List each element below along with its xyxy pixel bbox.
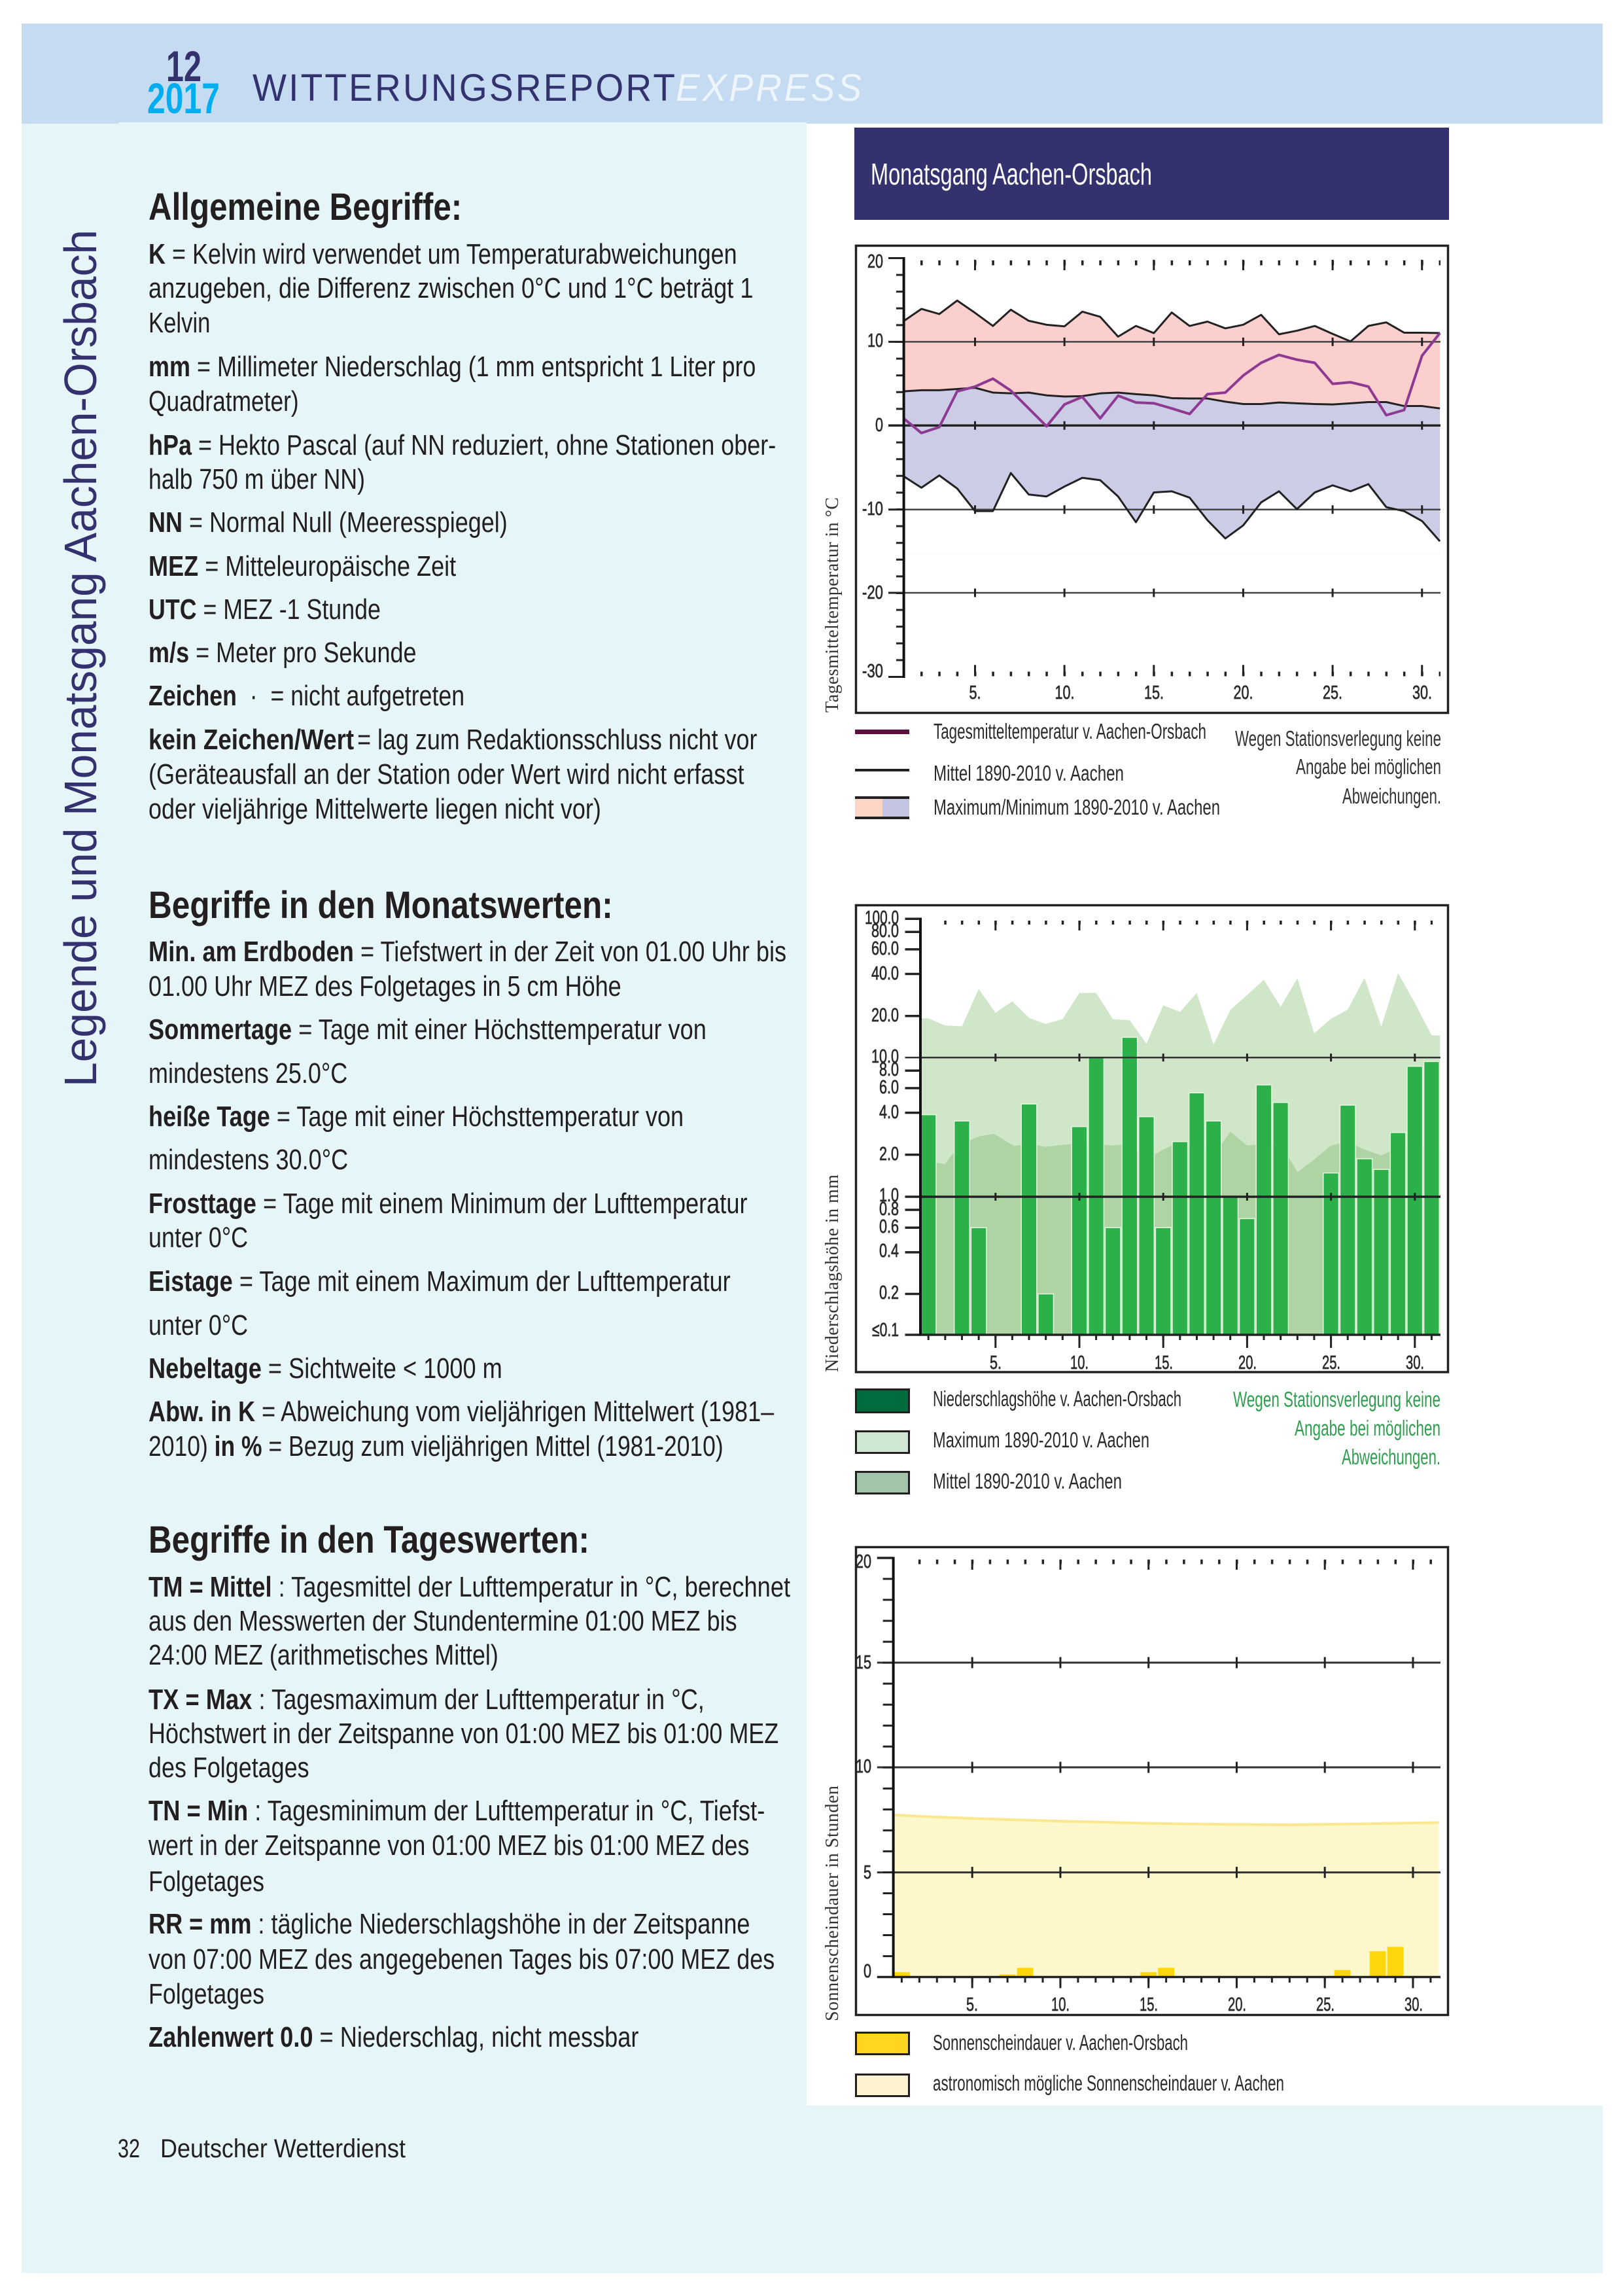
report name: WITTERUNGSREPORT: [253, 67, 675, 109]
left column panel top edge: [118, 122, 807, 125]
y axis labels: 0.2: [879, 1282, 899, 1303]
definition Frosttage: Frosttage = Tage mit einem Minimum der Lufttemperatur: [148, 1188, 748, 1220]
y axis labels: 0: [864, 1961, 871, 1982]
definition Eistage: unter 0°C: [148, 1309, 248, 1341]
chart: precipitation: [856, 906, 1448, 1373]
definition TM: TM = Mittel : Tagesmittel der Lufttemperatur in °C, berechnet: [148, 1571, 790, 1603]
x axis labels: 25.: [1323, 682, 1342, 703]
legend: precipitation maximum: Maximum 1890-2010 v. Aachen: [933, 1428, 1149, 1452]
definition Zeichen: Zeichen · = nicht aufgetreten: [148, 680, 464, 712]
definition K: K = Kelvin wird verwendet um Temperaturabweichungen: [148, 238, 737, 270]
y axis labels: 80.0: [871, 921, 899, 942]
y axis labels: [856, 1551, 871, 1982]
legend: mean line: Mittel 1890-2010 v. Aachen: [934, 761, 1124, 785]
definition Abw. in K: Abw. in K = Abweichung vom vieljährigen Mittelwert (1981–: [148, 1396, 775, 1428]
x axis labels: 15.: [1140, 1994, 1158, 2015]
definition TX: Höchstwert in der Zeitspanne von 01:00 MEZ bis 01:00 MEZ: [148, 1718, 778, 1750]
definition Sommertage: mindestens 25.0°C: [148, 1057, 347, 1089]
legend: monthly line: Tagesmitteltemperatur v. Aachen-Orsbach: [934, 719, 1206, 743]
legend: station sunshine: [856, 2030, 1188, 2055]
section: Begriffe in den Tageswerten: [148, 1519, 790, 2053]
y axis labels: 0.4: [879, 1241, 899, 1262]
y axis labels: [862, 251, 883, 682]
y axis labels: 10.0: [871, 1046, 899, 1067]
definition K: [148, 238, 753, 339]
definition Zahlenwert: Zahlenwert 0.0 = Niederschlag, nicht messbar: [148, 2021, 639, 2053]
definition MEZ: MEZ = Mitteleuropäische Zeit: [148, 550, 456, 582]
definition kein Zeichen/Wert: [148, 724, 757, 825]
minimum band: [903, 388, 1440, 554]
y axis labels: 0.8: [879, 1199, 899, 1220]
definition kein Zeichen/Wert: kein Zeichen/Wert: [148, 724, 354, 756]
y axis labels: 60.0: [871, 938, 899, 959]
x axis labels: 10.: [1055, 682, 1074, 703]
section: Allgemeine Begriffe: [148, 186, 776, 825]
x axis labels: 20.: [1238, 1352, 1257, 1373]
legend: possible sunshine: astronomisch mögliche Sonnenscheindauer v. Aachen: [933, 2071, 1284, 2095]
y axis labels: 40.0: [871, 963, 899, 984]
y axis labels: 8.0: [879, 1059, 899, 1080]
legend: monthly line: [855, 719, 1206, 743]
axis title: sunshine: Sonnenscheindauer in Stunden: [822, 1786, 843, 2021]
y axis labels: -10: [862, 499, 883, 520]
note: station relocation, temperature: Wegen Stationsverlegung keine: [1235, 726, 1441, 751]
definition Abw. in K: 2010) in % = Bezug zum vieljährigen Mittel (1981-2010): [148, 1430, 724, 1462]
x axis labels: 5.: [990, 1352, 1002, 1373]
y axis labels: 1.0: [879, 1185, 899, 1206]
y axis labels: 20: [856, 1551, 871, 1572]
definition kein Zeichen/Wert: = lag zum Redaktionsschluss nicht vor: [357, 724, 757, 756]
y axis labels: 100.0: [865, 908, 899, 928]
definition Min. am Erdboden: [148, 936, 786, 1002]
definition Min. am Erdboden: 01.00 Uhr MEZ des Folgetages in 5 cm Höhe: [148, 970, 621, 1002]
legend: precipitation chart: [856, 1386, 1181, 1493]
heading: Allgemeine Begriffe:: [148, 186, 462, 228]
note: station relocation, temperature: Abweichungen.: [1342, 784, 1441, 808]
definition NN: NN = Normal Null (Meeresspiegel): [148, 506, 508, 539]
y axis labels: 6.0: [879, 1077, 899, 1098]
legend: temperature chart: [855, 719, 1220, 819]
definition hPa: halb 750 m über NN): [148, 463, 365, 495]
definition TX: TX = Max : Tagesmaximum der Lufttemperatur in °C,: [148, 1684, 705, 1716]
definition RR: RR = mm : tägliche Niederschlagshöhe in der Zeitspanne: [148, 1908, 750, 1940]
definition mm: mm = Millimeter Niederschlag (1 mm entspricht 1 Liter pro: [148, 351, 756, 383]
legend: possible sunshine: [856, 2071, 1284, 2096]
legend: precipitation maximum: [856, 1428, 1149, 1453]
x axis labels: 15.: [1155, 1352, 1173, 1373]
definition Frosttage: unter 0°C: [148, 1222, 248, 1254]
x axis labels: [969, 682, 1432, 703]
y axis labels: -20: [862, 582, 883, 603]
y axis labels: [865, 908, 899, 1341]
x axis labels: [990, 1352, 1424, 1373]
definition mm: Quadratmeter): [148, 385, 299, 417]
chart: sunshine duration: [856, 1547, 1448, 2015]
note: station relocation, precipitation: [1233, 1387, 1440, 1469]
definition TN: wert in der Zeitspanne von 01:00 MEZ bis 01:00 MEZ des: [148, 1829, 749, 1862]
report name suffix: EXPRESS: [676, 67, 862, 109]
definition Eistage: Eistage = Tage mit einem Maximum der Lufttemperatur: [148, 1265, 731, 1298]
definition Min. am Erdboden: Min. am Erdboden = Tiefstwert in der Zeit von 01.00 Uhr bis: [148, 936, 786, 968]
maximum band: [903, 300, 1440, 554]
legend: precipitation mean: Mittel 1890-2010 v. Aachen: [933, 1469, 1122, 1493]
x axis labels: 25.: [1316, 1994, 1335, 2015]
axis title: temperature: Tagesmitteltemperatur in °C: [822, 497, 843, 713]
definition Sommertage: Sommertage = Tage mit einer Höchsttemperatur von: [148, 1014, 707, 1046]
year: 2017: [147, 74, 220, 122]
x axis labels: 30.: [1406, 1352, 1424, 1373]
y axis labels: 20: [867, 251, 883, 272]
y axis labels: 10: [856, 1756, 871, 1777]
x axis labels: 30.: [1405, 1994, 1423, 2015]
footer: page number and publisher: 32: [118, 2134, 140, 2163]
maximum area: [920, 973, 1440, 1335]
y axis labels: 0.6: [879, 1216, 899, 1237]
definition RR: Folgetages: [148, 1978, 264, 2010]
definition kein Zeichen/Wert: oder vieljährige Mittelwerte liegen nicht vor): [148, 793, 601, 825]
y axis labels: 4.0: [879, 1102, 899, 1123]
legend: sunshine chart: [856, 2030, 1284, 2096]
definition Frosttage: [148, 1188, 748, 1254]
definition K: Kelvin: [148, 307, 210, 339]
definition Sommertage: [148, 1014, 707, 1089]
daily sunshine bars: [894, 1947, 1403, 1977]
section: Begriffe in den Monatswerten: [148, 885, 786, 1462]
right white column: [807, 124, 1603, 2106]
astronomically possible sunshine area: [894, 1815, 1439, 1977]
definition RR: von 07:00 MEZ des angegebenen Tages bis 07:00 MEZ des: [148, 1943, 775, 1975]
maximum line: [903, 300, 1440, 342]
daily precipitation bars: [920, 1037, 1439, 1335]
note: station relocation, precipitation: Wegen Stationsverlegung keine: [1233, 1387, 1440, 1411]
x axis labels: 10.: [1070, 1352, 1089, 1373]
heading: Begriffe in den Monatswerten:: [148, 885, 613, 927]
definition heiße Tage: heiße Tage = Tage mit einer Höchsttemperatur von: [148, 1101, 684, 1133]
definition TM: aus den Messwerten der Stundentermine 01:00 MEZ bis: [148, 1605, 737, 1637]
x axis labels: 5.: [966, 1994, 978, 2015]
definition TN: TN = Min : Tagesminimum der Lufttemperatur in °C, Tiefst-: [148, 1795, 765, 1827]
legend: max min swatch: Maximum/Minimum 1890-2010 v. Aachen: [934, 795, 1220, 819]
vertical section title: Legende und Monatsgang Aachen-Orsbach: [55, 230, 106, 1087]
y axis labels: 20.0: [871, 1005, 899, 1026]
header band: [22, 24, 1603, 124]
month number: 12: [166, 42, 201, 90]
axis title: precipitation: Niederschlagshöhe in mm: [822, 1174, 843, 1372]
mean area: [920, 1132, 1440, 1335]
y axis labels: -30: [862, 661, 883, 682]
definition TN: [148, 1795, 765, 1898]
definition TN: Folgetages: [148, 1865, 264, 1898]
minimum line: [903, 473, 1440, 541]
y axis labels: 5: [864, 1862, 871, 1883]
legend: mean line: [855, 761, 1124, 785]
legend: station precipitation: Niederschlagshöhe v. Aachen-Orsbach: [933, 1386, 1181, 1411]
x axis labels: 20.: [1228, 1994, 1246, 2015]
note: station relocation, temperature: Angabe bei möglichen: [1296, 754, 1441, 779]
definition kein Zeichen/Wert: (Geräteausfall an der Station oder Wert wird nicht erfasst: [148, 758, 744, 790]
definition K: anzugeben, die Differenz zwischen 0°C und 1°C beträgt 1: [148, 272, 753, 304]
legend: station precipitation: [856, 1386, 1181, 1412]
definition TM: 24:00 MEZ (arithmetisches Mittel): [148, 1639, 498, 1671]
definition RR: [148, 1908, 775, 2010]
definition Nebeltage: Nebeltage = Sichtweite < 1000 m: [148, 1352, 502, 1385]
definition UTC: UTC = MEZ -1 Stunde: [148, 593, 381, 626]
definition heiße Tage: [148, 1101, 684, 1176]
monthly temperature line: [903, 333, 1440, 433]
definition hPa: [148, 429, 776, 495]
note: station relocation, precipitation: Angabe bei möglichen: [1295, 1416, 1440, 1440]
legend: max min swatch: [855, 795, 1220, 819]
definition heiße Tage: mindestens 30.0°C: [148, 1144, 348, 1176]
x axis labels: 30.: [1412, 682, 1432, 703]
panel: chart title bar: [854, 128, 1449, 220]
footer: page number and publisher: Deutscher Wetterdienst: [160, 2134, 406, 2163]
note: station relocation, temperature: [1235, 726, 1441, 808]
definition TX: des Folgetages: [148, 1752, 309, 1784]
legend: precipitation mean: [856, 1469, 1122, 1493]
definition m/s: m/s = Meter pro Sekunde: [148, 637, 417, 669]
x axis labels: 15.: [1144, 682, 1164, 703]
x axis labels: 25.: [1322, 1352, 1340, 1373]
y axis labels: 10: [867, 330, 883, 351]
definition Abw. in K: [148, 1396, 775, 1462]
definition mm: [148, 351, 756, 417]
chart: daily mean temperature: [856, 246, 1448, 713]
x axis labels: 20.: [1234, 682, 1253, 703]
mean line: [903, 388, 1440, 408]
heading: Begriffe in den Tageswerten:: [148, 1519, 589, 1561]
y axis labels: 2.0: [879, 1144, 899, 1165]
definition TX: [148, 1684, 778, 1784]
x axis labels: 5.: [969, 682, 981, 703]
y axis labels: 0: [875, 415, 883, 436]
definition Eistage: [148, 1265, 731, 1341]
x axis labels: 10.: [1051, 1994, 1070, 2015]
header: issue date and report title: [147, 42, 862, 122]
x axis labels: [966, 1994, 1423, 2015]
panel: chart title bar: Monatsgang Aachen-Orsbach: [871, 157, 1152, 191]
legend: station sunshine: Sonnenscheindauer v. Aachen-Orsbach: [933, 2030, 1188, 2055]
definition TM: [148, 1571, 790, 1671]
y axis labels: 15: [856, 1652, 871, 1673]
y axis labels: ≤0.1: [872, 1320, 899, 1341]
note: station relocation, precipitation: Abweichungen.: [1342, 1445, 1440, 1469]
definition hPa: hPa = Hekto Pascal (auf NN reduziert, ohne Stationen ober-: [148, 429, 776, 461]
